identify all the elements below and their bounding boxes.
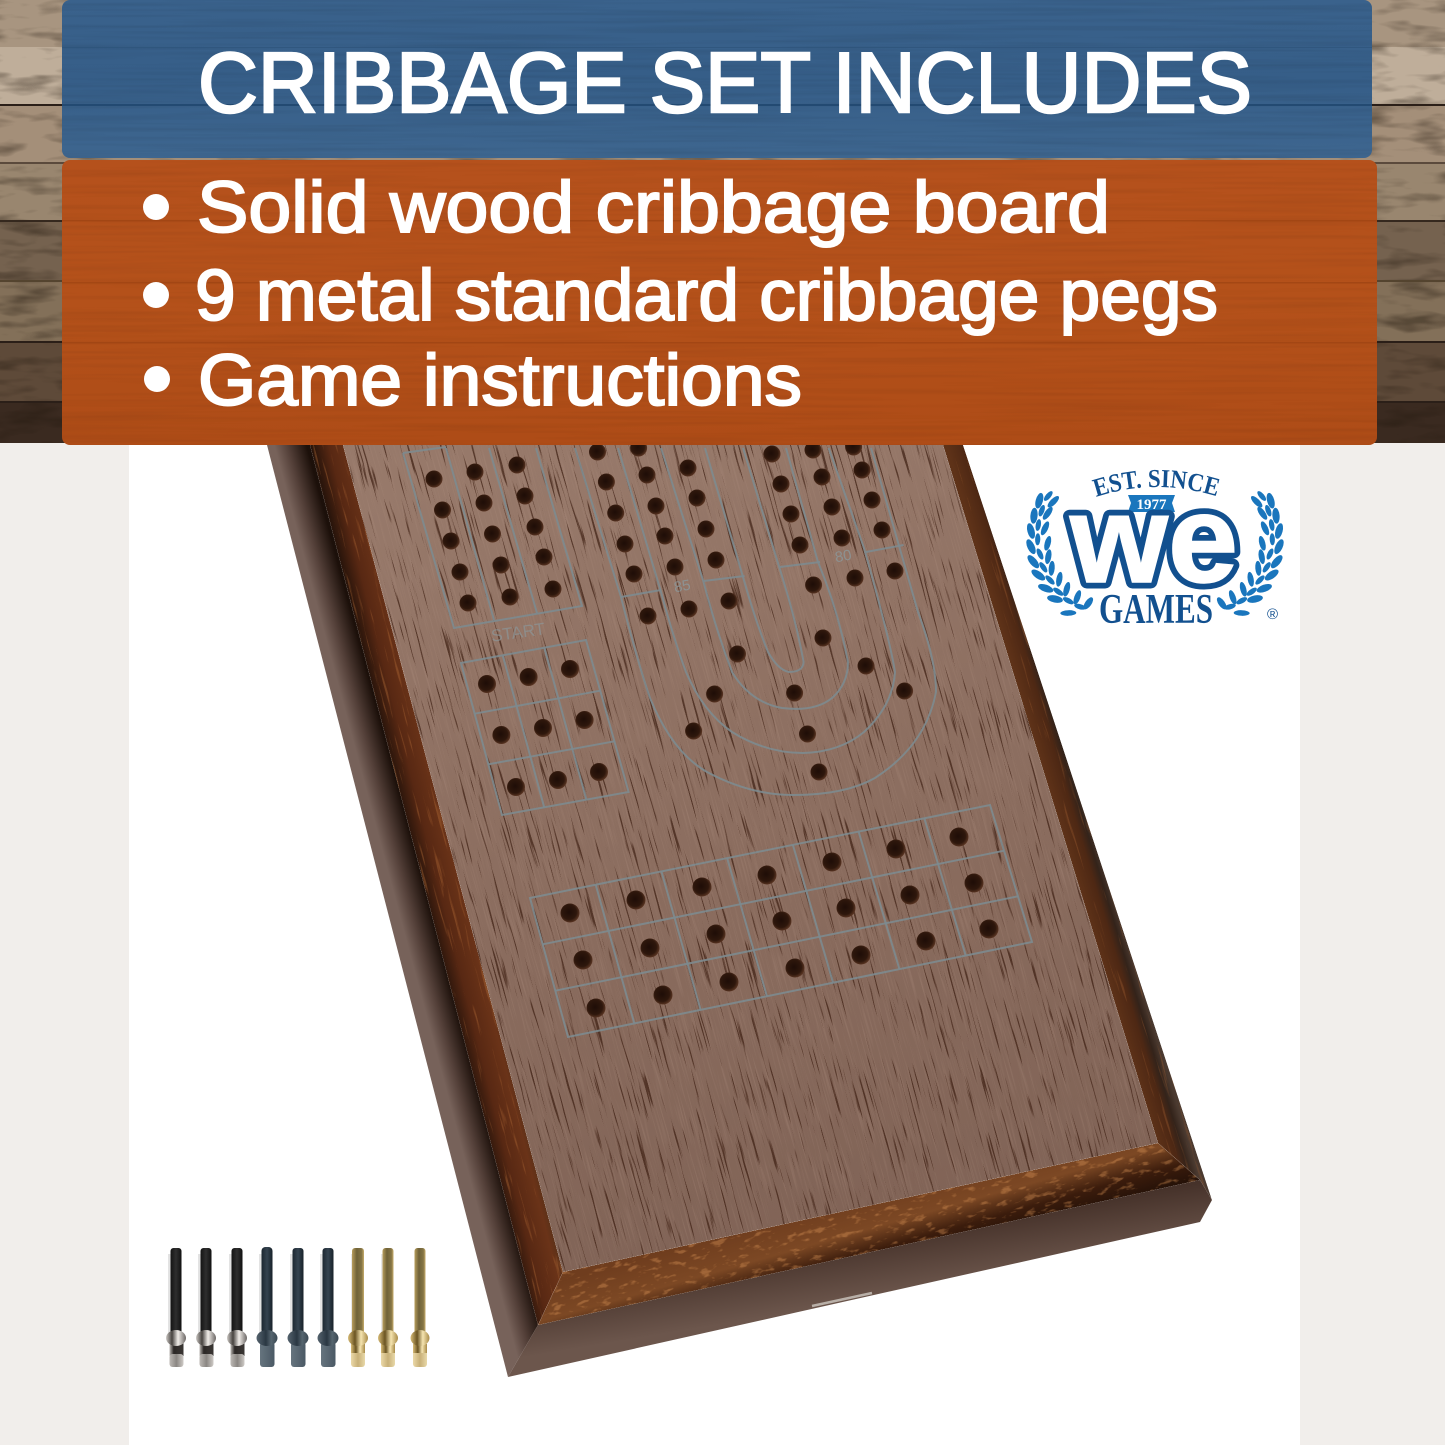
logo: we wordmark fill: we	[1069, 471, 1238, 609]
bullet: solid wood board: Solid wood cribbage board	[197, 168, 1110, 248]
board: engraved 85 label: 85	[673, 577, 692, 596]
bullet: game instructions: Game instructions	[198, 341, 802, 421]
logo: right laurel	[1215, 490, 1286, 616]
panel: orange contents list	[62, 160, 1377, 445]
black peg 1	[166, 1248, 186, 1367]
board: peg holes	[426, 438, 998, 1018]
WE Games logo	[1026, 470, 1284, 633]
slate peg 1	[256, 1247, 278, 1367]
logo: GAMES text: GAMES	[1099, 587, 1213, 633]
board: engraved START label: START	[490, 619, 546, 646]
board: engraved score lines	[403, 447, 1032, 1037]
board: top face with wood grain	[323, 445, 1204, 1275]
black peg 2	[196, 1248, 216, 1367]
logo: 1977 banner	[1128, 495, 1175, 512]
logo: left laurel	[1024, 490, 1095, 616]
board: engraved 80 label: 80	[834, 547, 853, 566]
blue wood background	[62, 0, 1372, 158]
black peg 3	[227, 1248, 247, 1367]
slate peg 3	[318, 1248, 338, 1367]
cribbage board	[267, 438, 1273, 1377]
board: bottom side face	[508, 1180, 1212, 1377]
orange wood background	[62, 160, 1377, 445]
logo: 1977 text: 1977	[1136, 497, 1167, 513]
slate peg 2	[288, 1248, 308, 1367]
panel: blue heading	[62, 0, 1372, 158]
board: left side face	[267, 445, 538, 1377]
logo: registered mark: ®	[1267, 606, 1278, 623]
nine-hole peg storage grid	[461, 640, 629, 815]
U-shaped scoring tracks	[575, 448, 936, 795]
21-hole lower grid	[530, 805, 1032, 1037]
background: off-white side margins	[0, 443, 1445, 1445]
logo: EST. SINCE arc text: EST. SINCE	[1092, 470, 1220, 497]
title: CRIBBAGE SET INCLUDES	[198, 36, 1252, 131]
board: metal hinge glint	[812, 1293, 872, 1306]
start block outlines	[403, 447, 582, 628]
bullet: metal pegs: 9 metal standard cribbage pegs	[195, 256, 1218, 336]
brass peg 1	[348, 1248, 368, 1367]
brass peg 3	[410, 1248, 430, 1367]
board: right bevel	[943, 445, 1212, 1200]
logo: we wordmark outline: we	[1069, 471, 1238, 609]
board: left bevel	[310, 445, 563, 1325]
wooden plank backdrop	[0, 0, 1445, 443]
set of nine metal pegs	[166, 1247, 430, 1367]
board: bottom bevel	[538, 1143, 1200, 1325]
brass peg 2	[378, 1248, 398, 1367]
background: white centre column	[129, 443, 1300, 1445]
